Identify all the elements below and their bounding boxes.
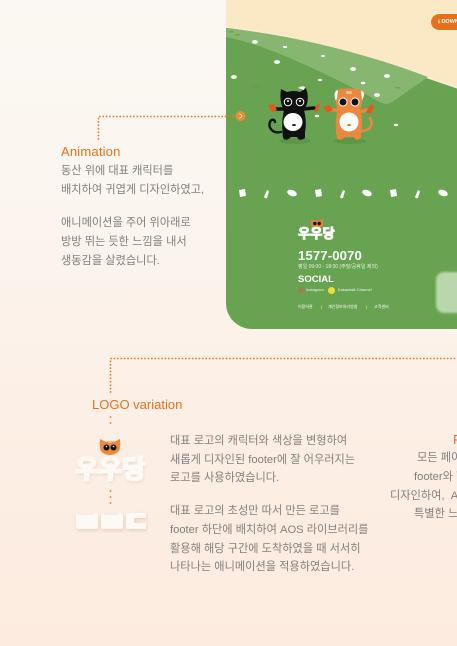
text: animation description: 생동감을 살렸습니다. — [61, 255, 160, 267]
footer description column, clipped at page edge — [390, 432, 457, 520]
text: logo variation description: 활용해 해당 구간에 도착하였을 때 서서히 — [170, 543, 361, 555]
footer links: 이용약관 — [298, 304, 313, 309]
dotted connector: heading to logo — [110, 416, 112, 424]
social heading: SOCIAL — [298, 274, 334, 285]
dotted connector: animation — [98, 111, 246, 140]
footer links: 고객센터 — [374, 304, 389, 309]
icon: daisies — [231, 40, 398, 126]
text: logo variation description: 새롭게 디자인된 footer에 잘 어우러지는 — [170, 454, 355, 466]
text: animation description: 방방 뛰는 듯한 느낌을 내서 — [61, 236, 187, 248]
footer links: | — [366, 304, 367, 309]
text: animation description: 배치하여 귀엽게 디자인하였고, — [61, 184, 204, 196]
text: logo variation description: 대표 로고의 초성만 따서 만든 로고를 — [170, 505, 340, 517]
logo variants — [75, 416, 148, 532]
text: logo variation description: footer 하단에 배치하여 AOS 라이브러리를 — [170, 524, 368, 536]
icon: bread row — [239, 188, 449, 198]
text: animation description: 동산 위에 대표 캐릭터를 — [61, 165, 173, 177]
floating blurred button — [436, 272, 457, 313]
dotted connector: between logos — [110, 490, 112, 504]
text: logo variation description — [170, 434, 368, 573]
cat shadows — [279, 138, 366, 144]
hills illustration — [226, 26, 457, 329]
panel: website footer preview — [226, 0, 457, 329]
heading: LOGO variation: LOGO variation — [92, 397, 182, 412]
logo initials mark — [76, 513, 148, 532]
text: logo variation description: 대표 로고의 캐릭터와 색상을 변형하여 — [170, 435, 347, 447]
dotted connector: logo variation — [110, 358, 456, 393]
social links — [298, 287, 372, 294]
text: logo variation description: 로고를 사용하였습니다. — [170, 472, 279, 484]
download button — [430, 13, 457, 31]
icon: orange cat — [323, 88, 374, 140]
opening hours: 평일 09:00 - 18:00 (주말/공휴일 제외) — [298, 264, 378, 270]
icon: black cat — [268, 86, 320, 140]
logo wordmark: 우우당 — [75, 456, 146, 484]
text: footer description — [390, 451, 457, 520]
phone number: 1577-0070 — [298, 248, 362, 263]
icon: cat logo — [100, 439, 120, 455]
footer links: | — [321, 304, 322, 309]
social links: Kakaotalk Channel — [338, 287, 372, 292]
text: animation description: 애니메이션을 주어 위아래로 — [61, 217, 191, 229]
footer logo — [298, 219, 335, 241]
social links: Instagram — [306, 287, 324, 292]
footer logo: 우우당 — [298, 226, 335, 241]
text: animation description — [61, 164, 204, 267]
heading: Animation: Animation — [61, 144, 121, 159]
footer links: 개인정보처리방침 — [328, 304, 357, 309]
text: logo variation description: 나타나는 애니메이션을 적용하였습니다. — [170, 561, 354, 573]
footer links — [298, 304, 389, 309]
